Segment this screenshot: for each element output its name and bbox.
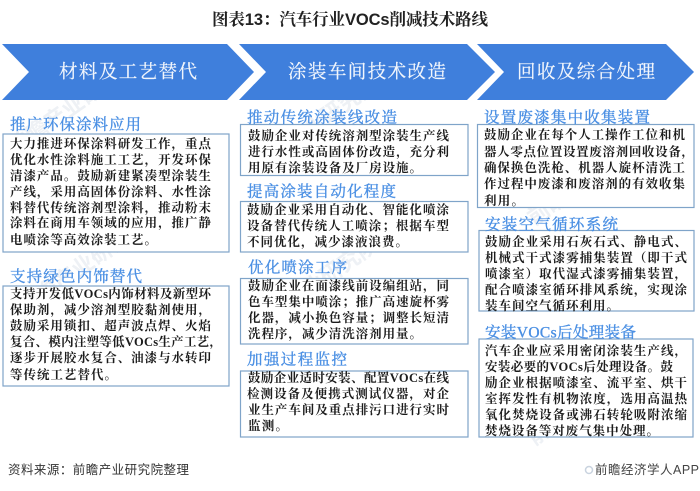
panel: 支持绿色内饰替代: 复合、模内注塑等低VOCs生产工艺， (10, 334, 222, 349)
panel: 安装空气循环系统: 配合喷漆室循环排风系统，实现涂 (485, 282, 687, 297)
panel: 优化喷涂工序: 洗程序，减少清洗溶剂用量。 (248, 326, 422, 341)
panel: 优化喷涂工序: 鼓励企业在面漆线前设编组站，同 (248, 278, 449, 293)
panel: 推动传统涂装线改造: 进行水性或高固体份改造，充分利 (248, 144, 449, 159)
panel: 设置废漆集中收集装置: 器人零点位置设置废溶剂回收设备， (484, 144, 694, 159)
panel: 加强过程监控: 检测设备及便携式测试仪器，对企 (247, 386, 449, 401)
panel: 安装空气循环系统: 鼓励企业采用石灰石式、静电式、 (485, 234, 687, 249)
panel: 设置废漆集中收集装置: 作过程中废漆和废溶剂的有效收集 (484, 176, 685, 191)
panel: 推广环保涂料应用: 清漆产品。鼓励新建紧凑型涂装生 (10, 168, 211, 183)
panel: 推广环保涂料应用: 涂料在商用车领域的应用，推广静 (10, 215, 211, 230)
panel: 加强过程监控: 监测。 (248, 418, 288, 433)
panel: 支持绿色内饰替代: 保助剂，减少溶剂型胶黏剂使用， (10, 302, 211, 317)
panel: 推广环保涂料应用: 料替代传统溶剂型涂料，推动粉末 (10, 200, 211, 215)
arrow: 回收及综合处理 (477, 44, 694, 100)
panel: 安装VOCs后处理装备: 焚烧设备等对废气集中处理。 (485, 423, 659, 438)
panel: 提高涂装自动化程度: 鼓励企业采用自动化、智能化喷涂 (247, 202, 449, 217)
panel: 支持绿色内饰替代: 鼓励采用锁扣、超声波点焊、火焰 (10, 318, 211, 333)
panel: 支持绿色内饰替代: 等传统工艺替代。 (10, 367, 117, 382)
panel: 提高涂装自动化程度 (240, 182, 468, 252)
panel: 设置废漆集中收集装置: 利用。 (484, 193, 524, 208)
arrow: 回收及综合处理: 回收及综合处理 (517, 62, 655, 83)
panel: 设置废漆集中收集装置: 确保换色洗枪、机器人旋杯清洗工 (484, 160, 685, 175)
panel: 设置废漆集中收集装置: 鼓励企业在每个人工操作工位和机 (484, 127, 685, 142)
panel: 优化喷涂工序: 化器，减小换色容量；调整长短清 (248, 310, 449, 325)
text: 前瞻产业研究院 (243, 71, 383, 180)
panel: 推广环保涂料应用: 大力推进环保涂料研发工作，重点 (10, 136, 212, 151)
panel: 提高涂装自动化程度: 设备替代传统人工喷涂；根据车型 (247, 218, 449, 233)
source note: 资料来源：前瞻产业研究院整理 (8, 462, 189, 477)
panel: 安装VOCs后处理装备: 汽车企业应采用密闭涂装生产线， (485, 343, 687, 358)
text: 前瞻产业研究院 (13, 211, 153, 320)
panel: 安装VOCs后处理装备: 安装必要的VOCs后处理设备。鼓 (485, 359, 673, 374)
panel: 推动传统涂装线改造: 推动传统涂装线改造 (247, 108, 397, 126)
panel: 推广环保涂料应用: 推广环保涂料应用 (10, 116, 141, 134)
panel: 安装空气循环系统: 喷漆室）取代湿式漆雾捕集装置， (485, 266, 687, 281)
panel: 优化喷涂工序 (240, 258, 468, 344)
panel: 支持绿色内饰替代 (3, 268, 229, 386)
arrow: 涂装车间技术改造: 涂装车间技术改造 (288, 62, 446, 83)
panel: 支持绿色内饰替代: 支持绿色内饰替代 (10, 268, 142, 286)
panel: 加强过程监控: 加强过程监控 (247, 350, 347, 368)
panel: 提高涂装自动化程度: 提高涂装自动化程度 (247, 182, 396, 200)
panel: 设置废漆集中收集装置: 设置废漆集中收集装置 (484, 108, 650, 126)
panel: 推广环保涂料应用 (3, 116, 229, 252)
panel: 安装VOCs后处理装备: 励企业根据喷漆室、流平室、烘干 (485, 375, 687, 390)
panel: 推广环保涂料应用: 优化水性涂料施工工艺，开发环保 (10, 152, 211, 167)
panel: 安装空气循环系统 (479, 216, 694, 313)
panel: 安装VOCs后处理装备: 氧化焚烧设备或沸石转轮吸附浓缩 (485, 407, 687, 422)
panel: 推动传统涂装线改造 (240, 108, 468, 176)
panel: 设置废漆集中收集装置 (478, 108, 694, 208)
arrow: 材料及工艺替代: 材料及工艺替代 (59, 62, 197, 83)
arrow: 涂装车间技术改造 (239, 44, 495, 100)
panel: 安装空气循环系统: 装车间空气循环利用。 (485, 298, 619, 313)
panel: 推动传统涂装线改造: 鼓励企业对传统溶剂型涂装生产线 (248, 128, 449, 143)
panel: 加强过程监控: 业生产车间及重点排污口进行实时 (248, 402, 449, 417)
panel: 推广环保涂料应用: 产线，采用高固体份涂料、水性涂 (10, 184, 211, 199)
panel: 安装空气循环系统: 安装空气循环系统 (485, 216, 618, 234)
panel: 安装VOCs后处理装备: 室挥发性有机物浓度，选用高温热 (485, 391, 688, 406)
panel: 安装VOCs后处理装备: 安装VOCs后处理装备 (485, 324, 636, 342)
text: 前瞻产业研究院 (523, 341, 663, 450)
panel: 推动传统涂装线改造: 用原有涂装设备及厂房设施。 (248, 160, 422, 175)
logo: 前瞻经济学人APP: 前瞻经济学人APP (595, 462, 699, 477)
panel: 支持绿色内饰替代: 支持开发低VOCs内饰材料及新型环 (10, 286, 212, 301)
panel: 安装空气循环系统: 机械式干式漆雾捕集装置（即干式 (485, 250, 687, 265)
text: 前瞻产业研究院 (243, 231, 383, 340)
panel: 推广环保涂料应用: 电喷涂等高效涂装工艺。 (10, 232, 157, 247)
panel: 支持绿色内饰替代: 逐步开展胶水复合、油漆与水转印 (10, 350, 211, 365)
panel: 加强过程监控 (240, 350, 468, 437)
title: 图表13：汽车行业VOCs削减技术路线 (212, 9, 488, 29)
text: 前瞻产业研究院 (523, 121, 663, 230)
panel: 加强过程监控: 鼓励企业适时安装、配置VOCs在线 (248, 370, 449, 385)
panel: 优化喷涂工序: 色车型集中喷涂；推广高速旋杯雾 (248, 294, 449, 309)
text: 前瞻产业研究院 (3, 51, 143, 160)
panel: 安装VOCs后处理装备 (479, 324, 693, 438)
panel: 优化喷涂工序: 优化喷涂工序 (248, 258, 347, 276)
panel: 提高涂装自动化程度: 不同优化，减少漆液浪费。 (247, 234, 408, 249)
arrow: 材料及工艺替代 (2, 44, 254, 100)
